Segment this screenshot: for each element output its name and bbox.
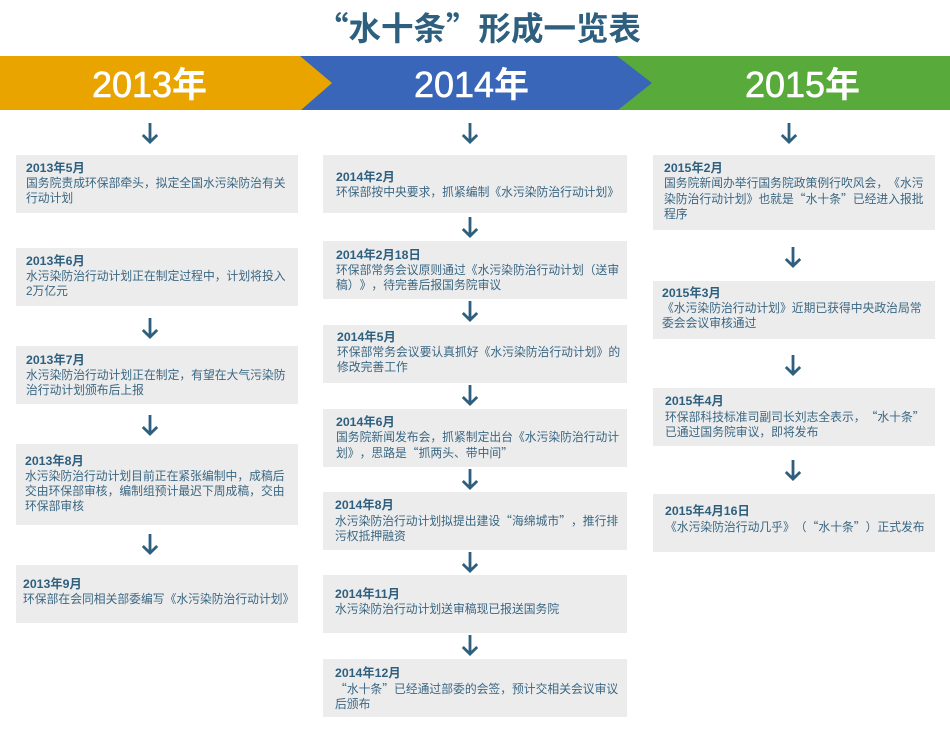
description: 程序 <box>664 206 688 220</box>
description: 水污染防治行动计划送审稿现已报送国务院 <box>335 602 559 616</box>
description <box>26 176 286 204</box>
date: 2014年11月 <box>335 586 400 600</box>
card: 2015年4月16日 <box>653 494 935 552</box>
description: 环保部按中央要求，抓紧编制《水污染防治行动计划》 <box>336 184 619 198</box>
description <box>662 300 922 330</box>
card: 2013年7月 <box>16 346 298 404</box>
card: 2015年3月 <box>653 281 935 339</box>
panel: 2015 column <box>653 123 935 552</box>
year segment: 2015: 2015年 <box>745 64 860 105</box>
card: 2014年8月 <box>323 492 627 550</box>
description <box>336 262 619 292</box>
date: 2013年9月 <box>23 576 82 590</box>
date: 2014年6月 <box>336 414 395 428</box>
description: 环保部科技标准司副司长刘志全表示，“水十条” <box>665 408 925 424</box>
date: 2013年5月 <box>26 160 85 174</box>
date: 2014年8月 <box>335 498 394 512</box>
year segment: 2014: 2014年 <box>414 64 529 105</box>
date: 2013年8月 <box>25 454 84 468</box>
description: 已通过国务院审议，即将发布 <box>665 424 818 438</box>
description: 环保部常务会议原则通过《水污染防治行动计划（送审 <box>336 262 619 276</box>
description: 2万亿元 <box>26 284 68 298</box>
description: 环保部审核 <box>25 499 84 513</box>
card: 2013年9月 <box>16 565 298 623</box>
date: 2015年4月 <box>665 394 724 408</box>
description: 环保部常务会议要认真抓好《水污染防治行动计划》的 <box>337 344 620 358</box>
date: 2015年4月16日 <box>665 504 750 518</box>
description: 《水污染防治行动计划》近期已获得中央政治局常 <box>662 300 922 314</box>
card: 2013年8月 <box>16 444 298 525</box>
description <box>665 408 925 438</box>
description <box>26 368 286 396</box>
card: 2014年6月 <box>323 409 627 467</box>
card: 2015年4月 <box>653 388 935 446</box>
arrow <box>462 635 478 656</box>
card: 2014年11月 <box>323 575 627 633</box>
description: 划》，思路是“抓两头、带中间” <box>336 444 513 460</box>
description: 水污染防治行动计划拟提出建设“海绵城市”，推行排 <box>335 512 618 528</box>
description: 水污染防治行动计划正在制定，有望在大气污染防 <box>26 368 286 382</box>
description: 国务院责成环保部牵头，拟定全国水污染防治有关 <box>26 176 286 190</box>
year segment: 2013: 2013年 <box>92 64 207 105</box>
description: 稿）》，待完善后报国务院审议 <box>336 278 501 292</box>
arrow <box>784 355 802 376</box>
year segment: 2015 <box>617 56 950 110</box>
description: 染防治行动计划》也就是“水十条”已经进入报批 <box>664 190 924 206</box>
description: 水污染防治行动计划目前正在紧张编制中，成稿后 <box>25 469 285 483</box>
description <box>335 680 618 710</box>
description: 行动计划 <box>26 190 73 204</box>
arrow <box>462 469 478 490</box>
description: 环保部在会同相关部委编写《水污染防治行动计划》 <box>23 592 294 606</box>
description: 治行动计划颁布后上报 <box>26 382 144 396</box>
card: 2013年6月 <box>16 248 298 306</box>
arrow <box>462 123 478 144</box>
arrow <box>462 552 478 573</box>
card: 2013年5月 <box>16 155 298 213</box>
arrow <box>462 301 478 322</box>
description <box>335 512 618 542</box>
date: 2015年3月 <box>662 286 721 300</box>
arrow <box>142 415 158 436</box>
title: “水十条”形成一览表 <box>316 3 641 50</box>
arrow <box>142 318 158 339</box>
year segment: 2013 <box>0 56 332 110</box>
date: 2014年2月18日 <box>336 248 421 262</box>
description <box>664 176 924 220</box>
date: 2013年6月 <box>26 254 85 268</box>
date: 2014年12月 <box>335 666 401 680</box>
description: 国务院新闻发布会，抓紧制定出台《水污染防治行动计 <box>336 430 619 444</box>
description: 委会会议审核通过 <box>662 316 756 330</box>
description <box>26 268 286 298</box>
card: 2014年2月18日 <box>323 241 627 299</box>
panel: 2014 column <box>323 123 627 717</box>
card: 2014年2月 <box>323 155 627 213</box>
description <box>25 469 285 513</box>
year segment: 2014 <box>300 56 652 110</box>
arrow <box>142 123 158 144</box>
date: 2014年2月 <box>336 170 395 184</box>
timeline banner with three year arrows <box>0 56 950 110</box>
arrow <box>462 217 478 238</box>
description: 国务院新闻办举行国务院政策例行吹风会，《水污 <box>664 176 924 190</box>
arrow <box>142 534 158 555</box>
description: 修改完善工作 <box>337 360 408 374</box>
description: 《水污染防治行动几乎》（“水十条”）正式发布 <box>665 518 925 534</box>
description: 污权抵押融资 <box>335 528 406 542</box>
arrow <box>784 247 802 268</box>
description <box>336 430 619 460</box>
description: 后颁布 <box>335 696 370 710</box>
arrow <box>780 123 798 144</box>
card: 2015年2月 <box>653 155 935 230</box>
panel: 2013 column <box>16 123 298 623</box>
date: 2014年5月 <box>337 330 396 344</box>
card: 2014年12月 <box>323 659 627 717</box>
description: “水十条”已经通过部委的会签，预计交相关会议审议 <box>335 680 618 696</box>
arrow <box>462 385 478 406</box>
date: 2015年2月 <box>664 160 723 174</box>
description <box>337 344 620 374</box>
description: 交由环保部审核，编制组预计最迟下周成稿，交由 <box>25 484 285 498</box>
description: 水污染防治行动计划正在制定过程中，计划将投入 <box>26 268 286 282</box>
arrow <box>784 460 802 481</box>
card: 2014年5月 <box>323 325 627 383</box>
date: 2013年7月 <box>26 352 85 366</box>
